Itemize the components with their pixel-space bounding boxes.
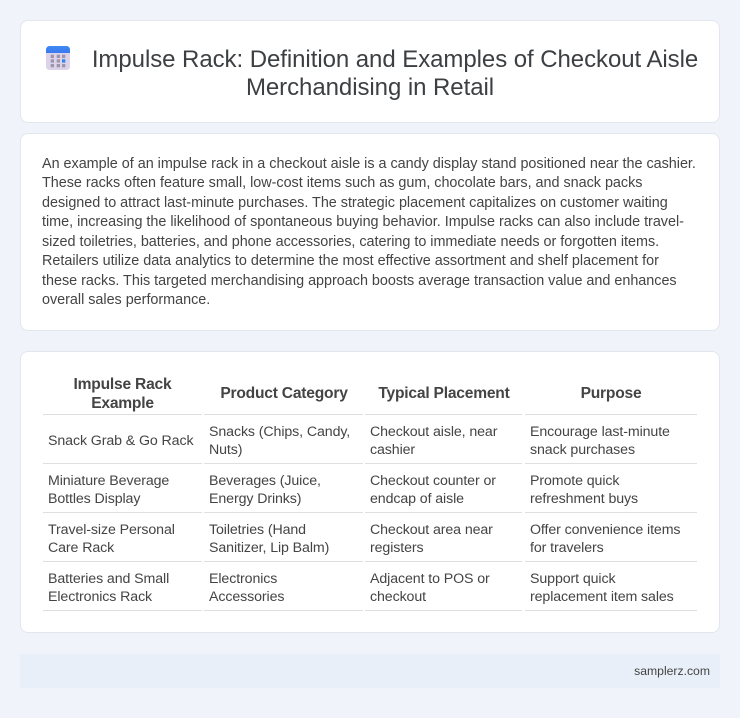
table header: Purpose <box>581 385 641 402</box>
panel: description <box>20 133 720 331</box>
row: snack rack: Checkout aisle, near <box>370 424 497 440</box>
footer source text: samplerz.com <box>634 664 710 678</box>
table header: Product Category <box>220 385 348 402</box>
row: snack rack: snack purchases <box>530 442 635 458</box>
row: personal care rack: Checkout area near <box>370 522 493 538</box>
title: Impulse Rack: Definition and Examples of Checkout Aisle <box>92 46 698 73</box>
footer bar <box>20 654 720 688</box>
description text: these racks. This targeted merchandising approach boosts average transaction value and enhances <box>42 273 677 289</box>
row: personal care rack: Care Rack <box>48 540 114 556</box>
row: beverage display: Beverages (Juice, <box>209 473 321 489</box>
row: batteries rack: Batteries and Small <box>48 571 169 587</box>
row: beverage display <box>48 473 638 507</box>
row: beverage display: Promote quick <box>530 473 619 489</box>
row: personal care rack: Travel-size Personal <box>48 522 175 538</box>
panel: table card <box>20 351 720 633</box>
description text: sized toiletries, batteries, and phone accessories, catering to immediate needs or forgotten items. <box>42 234 659 250</box>
row: batteries rack: checkout <box>370 589 426 605</box>
table header: Typical Placement <box>378 385 510 402</box>
row: batteries rack: replacement item sales <box>530 589 674 605</box>
row: snack rack: Snack Grab & Go Rack <box>48 433 193 449</box>
row: beverage display: Bottles Display <box>48 491 140 507</box>
row: snack rack: Snacks (Chips, Candy, <box>209 424 350 440</box>
row: beverage display: Miniature Beverage <box>48 473 169 489</box>
description text: time, increasing the likelihood of spontaneous buying behavior. Impulse racks can also include travel- <box>42 214 684 230</box>
table <box>43 376 697 611</box>
row: snack rack: cashier <box>370 442 415 458</box>
description text <box>42 156 696 308</box>
table header: Impulse Rack <box>74 376 171 393</box>
panel: title card <box>20 20 720 123</box>
row: personal care rack: Offer convenience items <box>530 522 680 538</box>
title: Merchandising in Retail <box>246 74 494 101</box>
row: personal care rack: for travelers <box>530 540 604 556</box>
row: batteries rack: Electronics <box>209 571 277 587</box>
row: beverage display: endcap of aisle <box>370 491 464 507</box>
row: personal care rack: Sanitizer, Lip Balm) <box>209 540 329 556</box>
row: batteries rack: Adjacent to POS or <box>370 571 490 587</box>
row: personal care rack <box>48 522 680 556</box>
description text: These racks often feature small, low-cost items such as gum, chocolate bars, and snack packs <box>42 175 642 191</box>
icon: calendar grid <box>46 46 70 70</box>
row: personal care rack: registers <box>370 540 424 556</box>
table header <box>74 376 642 412</box>
row: snack rack <box>48 424 670 458</box>
row: snack rack: Nuts) <box>209 442 242 458</box>
row: batteries rack: Electronics Rack <box>48 589 152 605</box>
row: beverage display: Checkout counter or <box>370 473 496 489</box>
row: batteries rack <box>48 571 674 605</box>
row: batteries rack: Support quick <box>530 571 615 587</box>
row: snack rack: Encourage last-minute <box>530 424 670 440</box>
description text: overall sales performance. <box>42 292 210 308</box>
description text: designed to attract last-minute purchases. The strategic placement capitalizes on customer waiting <box>42 195 668 211</box>
description text: Retailers utilize data analytics to determine the most effective assortment and shelf placement for <box>42 253 659 269</box>
table header: Example <box>91 395 154 412</box>
title <box>92 46 698 101</box>
row: beverage display: Energy Drinks) <box>209 491 301 507</box>
row: personal care rack: Toiletries (Hand <box>209 522 306 538</box>
row: beverage display: refreshment buys <box>530 491 638 507</box>
row: batteries rack: Accessories <box>209 589 284 605</box>
description text: An example of an impulse rack in a checkout aisle is a candy display stand positioned near the cashier. <box>42 156 696 172</box>
